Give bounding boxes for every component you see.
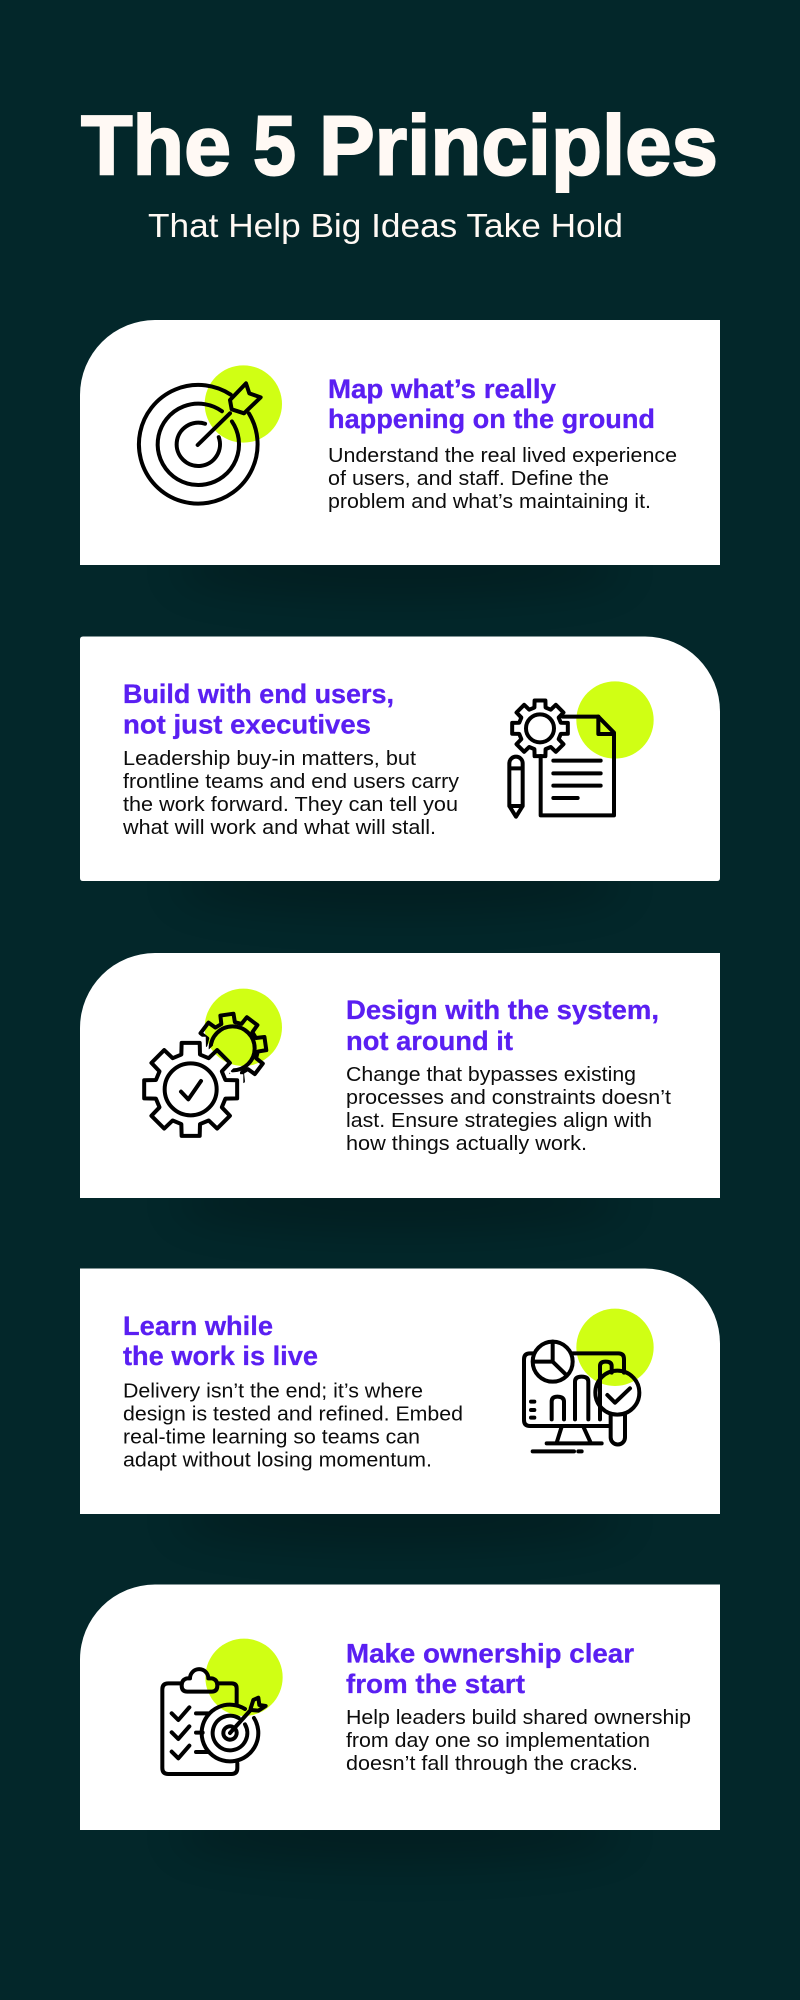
heading: card 3: Design with the system,: [346, 995, 659, 1025]
icon: monitor with charts and magnifier: [524, 1309, 654, 1451]
text: card 3 body: processes and constraints doesn’t: [346, 1086, 671, 1109]
heading: card 2: Build with end users,: [123, 679, 394, 709]
text: card 3 body: last. Ensure strategies align with: [346, 1109, 652, 1132]
icon: document, gear and pencil: [509, 681, 654, 817]
heading: card 2: not just executives: [123, 710, 371, 740]
heading: card 4: the work is live: [123, 1341, 318, 1371]
panel: card 5: [80, 1584, 720, 1863]
icon: two gears with check: [144, 989, 282, 1136]
text: card 1 body: Understand the real lived experience: [328, 444, 677, 467]
panel: card 1: [80, 320, 720, 598]
icon: target with dart: [139, 365, 282, 504]
text: card 3 body: how things actually work.: [346, 1132, 587, 1155]
heading: card 5: from the start: [346, 1669, 525, 1699]
heading: card 1: Map what’s really: [328, 374, 556, 404]
text: card 4 body: adapt without losing momentum.: [123, 1448, 432, 1472]
heading: card 5: Make ownership clear: [346, 1638, 634, 1668]
panel: card 3: [80, 953, 720, 1198]
text: card 3 body: Change that bypasses existing: [346, 1063, 636, 1086]
text: card 2 body: what will work and what will stall.: [122, 816, 436, 839]
text: card 2 body: Leadership buy-in matters, but: [123, 747, 416, 770]
panel: card 2: [80, 636, 720, 914]
text: card 2 body: the work forward. They can tell you: [123, 793, 458, 816]
heading: card 1: happening on the ground: [328, 404, 655, 434]
text: card 1 body: problem and what’s maintaining it.: [328, 490, 651, 513]
text: card 5 body: Help leaders build shared ownership: [346, 1706, 691, 1729]
text: card 1 body: of users, and staff. Define the: [328, 467, 609, 490]
text: card 2 body: frontline teams and end users carry: [123, 770, 460, 793]
text: card 4 body: real-time learning so teams can: [123, 1426, 420, 1448]
text: card 5 body: from day one so implementation: [346, 1729, 650, 1752]
heading: card 4: Learn while: [123, 1311, 273, 1341]
title: Principles: [319, 98, 718, 192]
text: card 4 body: design is tested and refined. Embed: [123, 1402, 463, 1426]
subtitle: That Help Big Ideas Take Hold: [148, 207, 623, 244]
heading: card 3: not around it: [346, 1026, 513, 1056]
icon: clipboard with target: [162, 1639, 283, 1774]
text: card 5 body: doesn’t fall through the cracks.: [346, 1752, 638, 1775]
text: card 4 body: Delivery isn’t the end; it’s where: [123, 1380, 423, 1402]
title: The: [81, 98, 231, 192]
panel: card 4: [80, 1268, 720, 1547]
title: 5: [253, 98, 296, 192]
